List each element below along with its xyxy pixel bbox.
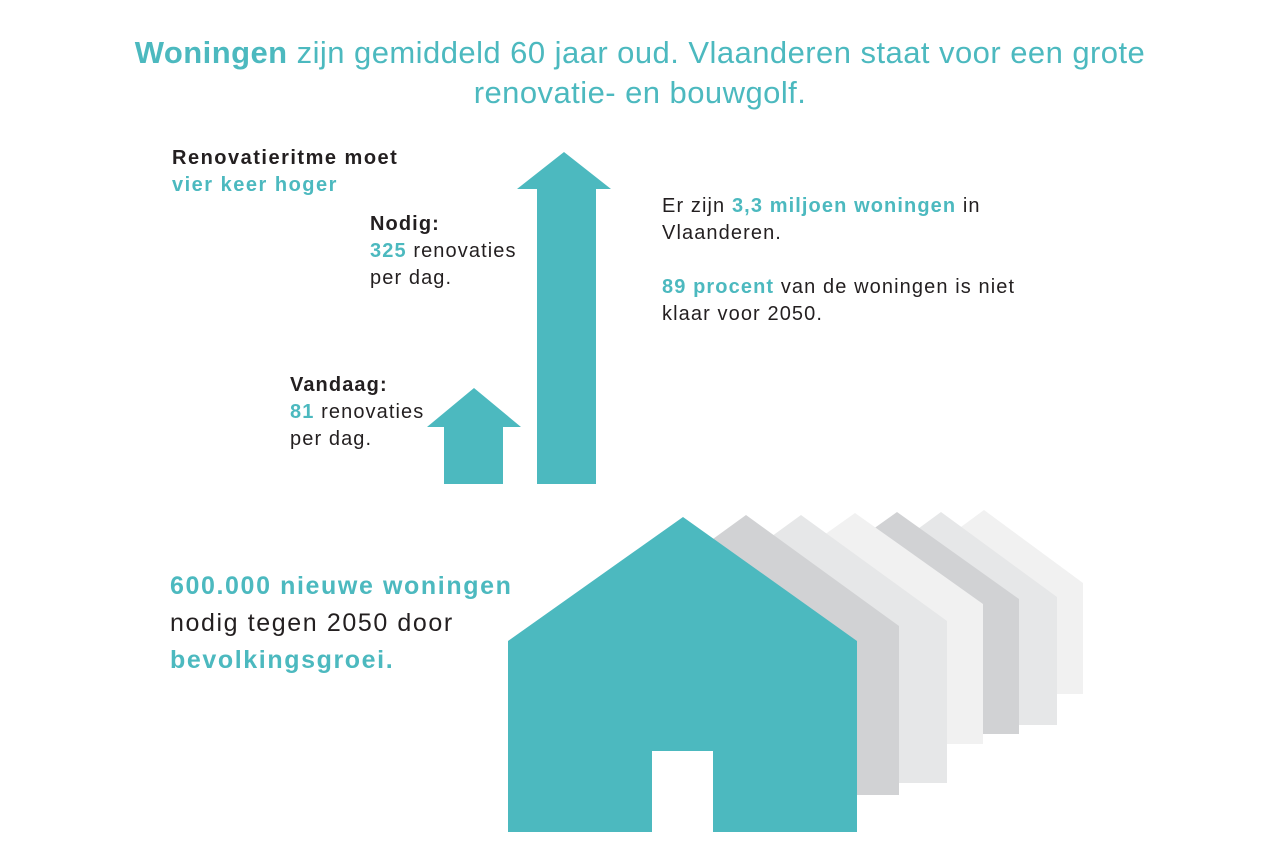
text: nieuwe woningen: 600.000 nieuwe woningen (170, 572, 512, 600)
text: nodig: per dag. (370, 267, 452, 289)
text: vandaag: 81 renovaties (290, 401, 424, 423)
heading: renovatieritme: vier keer hoger (172, 174, 338, 196)
text: nieuwe woningen (170, 572, 512, 674)
title: renovatie- en bouwgolf. (474, 75, 806, 110)
text: vandaag: per dag. (290, 428, 372, 450)
text: nodig: Nodig: (370, 213, 440, 235)
text: nodig: 325 renovaties (370, 240, 517, 262)
heading: renovatieritme (172, 147, 398, 196)
text: nodig (370, 213, 517, 289)
text: woningen stats: Er zijn 3,3 miljoen woningen in (662, 195, 981, 217)
heading: renovatieritme: Renovatieritme moet (172, 147, 398, 169)
houses (508, 510, 1083, 841)
text: woningen stats: 89 procent van de woningen is niet (662, 276, 1015, 298)
text: woningen stats: Vlaanderen. (662, 222, 782, 244)
arrow: big (517, 152, 611, 484)
title (134, 35, 1145, 110)
text: nieuwe woningen: nodig tegen 2050 door (170, 609, 454, 637)
text: vandaag: Vandaag: (290, 374, 388, 396)
main house (508, 517, 857, 832)
text: vandaag (290, 374, 424, 450)
text: nieuwe woningen: bevolkingsgroei. (170, 646, 394, 674)
title: Woningen zijn gemiddeld 60 jaar oud. Vlaanderen staat voor een grote (135, 35, 1145, 70)
text: woningen stats (662, 195, 1015, 325)
door (652, 751, 713, 841)
text: woningen stats: klaar voor 2050. (662, 303, 823, 325)
arrow: small (427, 388, 521, 484)
